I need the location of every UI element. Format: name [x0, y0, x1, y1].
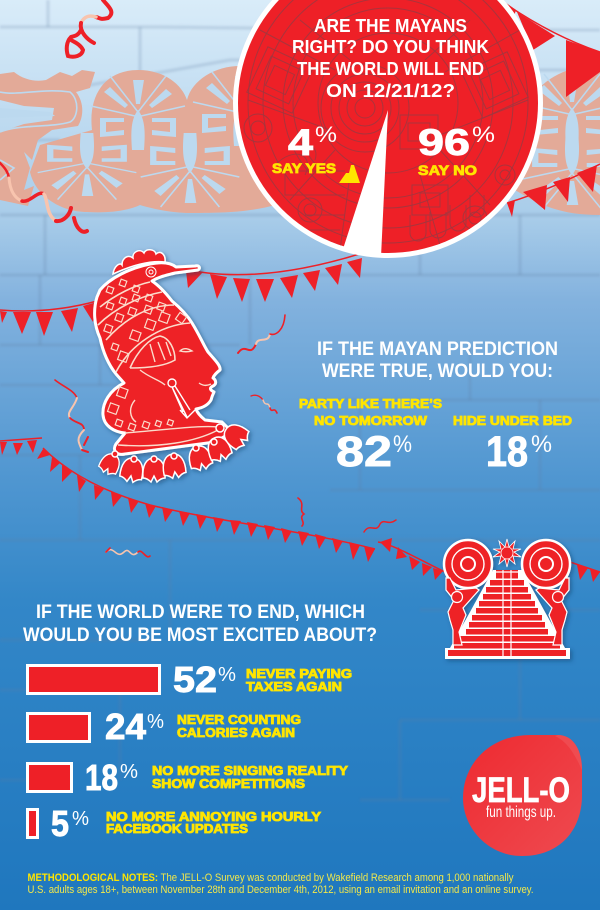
- heading: if prediction true: IF THE MAYAN PREDICTION: [317, 339, 558, 360]
- 96% say no: [418, 122, 495, 178]
- logo peel highlight: [555, 735, 582, 770]
- 96% say no: 96: [418, 122, 470, 163]
- 96% say no: %: [472, 122, 495, 147]
- pie question: THE WORLD WILL END: [297, 59, 484, 79]
- stat: party 82%: NO TOMORROW: [314, 413, 428, 428]
- bar row: 5% facebook: [28, 803, 322, 844]
- pie red disc: [238, 0, 538, 253]
- bar row: 52% taxes: 52: [173, 659, 217, 700]
- bar row: 18% reality shows: NO MORE SINGING REALITY: [152, 764, 349, 778]
- white 4% wedge: [343, 110, 388, 257]
- dragon frieze: [0, 66, 600, 215]
- 4% say yes: 4: [288, 122, 314, 163]
- bar row: 24% calories: %: [147, 711, 164, 733]
- bar row: 52% taxes: TAXES AGAIN: [246, 680, 342, 694]
- logo tagline: fun things up.: [486, 804, 556, 821]
- bar row: 5% facebook: FACEBOOK UPDATES: [106, 822, 248, 836]
- methodological notes: METHODOLOGICAL NOTES: The JELL-O Survey was conducted by Wakefield Research among 1,000 nationally: [28, 872, 514, 884]
- sun: [493, 539, 521, 567]
- bar row: 5% facebook: %: [72, 808, 89, 830]
- stat: hide 18%: [453, 413, 572, 476]
- JELL-O logo: [463, 735, 582, 856]
- bar row: 52% taxes: %: [218, 664, 236, 686]
- collar lines: [118, 400, 218, 446]
- streamers: middle confetti: [55, 315, 396, 557]
- bunting: lower: [0, 438, 600, 582]
- turban diamonds: [104, 279, 187, 431]
- stat: party 82%: PARTY LIKE THERE’S: [299, 396, 442, 411]
- 96% say no: SAY NO: [418, 162, 477, 178]
- bunting: top right: [500, 0, 600, 97]
- 4% say yes: SAY YES: [272, 160, 336, 176]
- stat: hide 18%: HIDE UNDER BED: [453, 413, 572, 428]
- earring: [168, 379, 195, 418]
- bar row: 24% calories: [28, 706, 301, 747]
- streamer: lower left: [0, 163, 87, 232]
- logo red blob: [463, 735, 582, 856]
- dragon body segments: [30, 66, 600, 215]
- stat: party 82%: 82: [336, 428, 392, 476]
- bunting: middle: [0, 248, 378, 336]
- serpent eye: [146, 267, 156, 277]
- 4% say yes: %: [315, 122, 337, 147]
- right disc: [522, 540, 570, 588]
- pie question: ARE THE MAYANS: [314, 16, 467, 36]
- 4% say yes: [272, 122, 337, 176]
- pie chart: world ending: [233, 0, 543, 258]
- pie question: ON 12/21/12?: [326, 81, 455, 101]
- pyramid steps: [448, 570, 566, 656]
- bar row: 5% facebook: NO MORE ANNOYING HOURLY: [106, 810, 322, 824]
- bar row: 24% calories: 24: [105, 706, 146, 747]
- streamer: top: [67, 0, 111, 57]
- bunting: right of pie: [507, 164, 600, 217]
- tassels: [97, 420, 252, 484]
- pie border: [233, 0, 543, 258]
- pie question: [292, 16, 489, 101]
- bar row: 24% calories: CALORIES AGAIN: [177, 726, 295, 740]
- bar row: 24% calories: NEVER COUNTING: [177, 713, 301, 727]
- pyramid white backing: [445, 570, 570, 659]
- heading: if prediction true: WERE TRUE, WOULD YOU:: [322, 361, 553, 382]
- dragon head: [0, 70, 95, 206]
- stat: hide 18%: 18: [486, 428, 528, 476]
- calendar line pattern: [244, 0, 528, 250]
- crown feathers: [113, 250, 165, 274]
- pie question: RIGHT? DO YOU THINK: [292, 37, 489, 57]
- central stairway lines: [494, 570, 520, 656]
- turban bands: [98, 282, 190, 372]
- bar row: 18% reality shows: [28, 757, 349, 798]
- bar row: 18% reality shows: 18: [85, 757, 118, 798]
- stat: party 82%: %: [393, 431, 412, 458]
- head silhouette: [95, 263, 232, 454]
- bar row: 52% taxes: [28, 659, 352, 700]
- methodological notes: U.S. adults ages 18+, between November 28th and December 4th, 2012, using an email invitation and an online survey.: [28, 884, 534, 896]
- logo wordmark: JELL-O: [472, 771, 570, 810]
- heading: if prediction true: [317, 339, 558, 382]
- face and ear details: [140, 342, 211, 385]
- bar row: 18% reality shows: SHOW COMPETITIONS: [152, 777, 305, 791]
- methodological notes: [28, 872, 534, 896]
- left disc: [444, 540, 492, 588]
- heading: most excited about: IF THE WORLD WERE TO END, WHICH: [36, 601, 365, 623]
- illustration: pyramid with figures: [444, 539, 570, 659]
- icon: yellow pyramid: [339, 165, 360, 183]
- heading: most excited about: WOULD YOU BE MOST EXCITED ABOUT?: [23, 624, 377, 646]
- left figure: [446, 578, 479, 645]
- stat: party 82%: [299, 396, 442, 476]
- bar row: 52% taxes: NEVER PAYING: [246, 667, 352, 681]
- right figure: [536, 578, 569, 645]
- stat: hide 18%: %: [531, 431, 552, 458]
- illustration: Mayan head: [95, 250, 252, 484]
- bar row: 5% facebook: 5: [51, 803, 69, 844]
- heading: most excited about: [23, 601, 377, 646]
- bar row: 18% reality shows: %: [120, 761, 138, 783]
